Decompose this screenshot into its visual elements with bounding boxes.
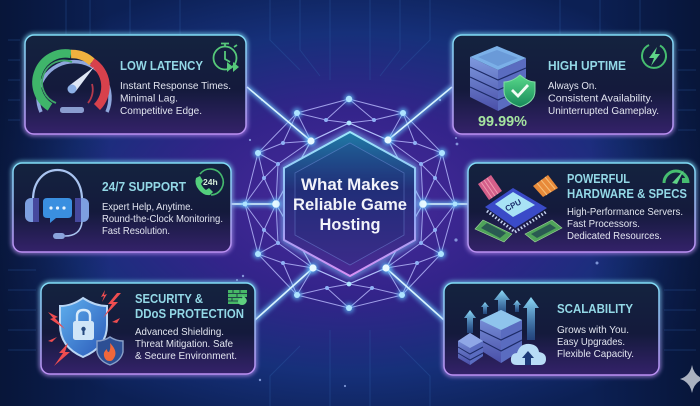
icon: speedometer gauge	[36, 53, 110, 113]
icon: 24h phone: 24h	[203, 177, 218, 187]
heading: HARDWARE & SPECS	[567, 187, 687, 201]
description: Consistent Availability.	[548, 92, 653, 104]
description: High-Performance Servers.	[567, 206, 683, 218]
heading: LOW LATENCY	[120, 59, 204, 73]
description: Advanced Shielding.	[135, 326, 224, 338]
panel: 24/7 support	[13, 163, 231, 252]
description: Dedicated Resources.	[567, 230, 662, 242]
panel: low latency	[25, 35, 246, 134]
description: & Secure Environment.	[135, 350, 237, 362]
panel: scalability	[444, 283, 659, 375]
description: Threat Mitigation. Safe	[135, 338, 233, 350]
description: Easy Upgrades.	[557, 336, 625, 348]
icon: power bolt	[642, 45, 666, 68]
icon: corner sparkle	[680, 365, 700, 393]
icon: cpu with heatsinks and ram: CPU	[504, 197, 523, 213]
network globe	[245, 99, 455, 308]
panel: powerful hardware and specs	[468, 163, 695, 252]
description: Minimal Lag.	[120, 92, 178, 104]
description: Round-the-Clock Monitoring.	[102, 213, 223, 225]
icon: stopwatch	[214, 44, 239, 72]
icon: 24h phone	[195, 169, 223, 195]
heading: SCALABILITY	[557, 302, 634, 316]
description: Competitive Edge.	[120, 105, 202, 117]
panel: high uptime	[453, 35, 673, 134]
description: Uninterrupted Gameplay.	[548, 105, 659, 117]
icon: stacked servers, arrows and cloud	[458, 290, 546, 365]
description: Grows with You.	[557, 324, 629, 336]
connector lines	[231, 87, 470, 320]
heading: DDoS PROTECTION	[135, 307, 244, 321]
center title: Hosting	[320, 215, 380, 234]
description: Flexible Capacity.	[557, 348, 634, 360]
network nodes	[241, 94, 459, 313]
panel: security and ddos protection	[41, 283, 255, 374]
icon: cpu with heatsinks and ram	[475, 175, 562, 242]
heading: HIGH UPTIME	[548, 59, 626, 73]
center hexagon	[284, 132, 415, 276]
description: Instant Response Times.	[120, 80, 231, 92]
description: Expert Help, Anytime.	[102, 201, 193, 213]
uptime figure: 99.99%	[478, 114, 527, 130]
icon: headset with chat bubble	[25, 170, 89, 239]
heading: POWERFUL	[567, 172, 630, 186]
center title: Reliable Game	[293, 195, 407, 214]
heading: 24/7 SUPPORT	[102, 180, 186, 194]
description: Always On.	[548, 80, 597, 92]
description: Fast Processors.	[567, 218, 640, 230]
description: Fast Resolution.	[102, 225, 170, 237]
icon: server rack with shield	[470, 46, 535, 111]
icon: shield with padlock	[48, 290, 123, 366]
center title: What Makes	[301, 175, 399, 194]
heading: SECURITY &	[135, 292, 203, 306]
icon: firewall	[228, 290, 247, 305]
icon: performance gauge	[664, 170, 688, 184]
